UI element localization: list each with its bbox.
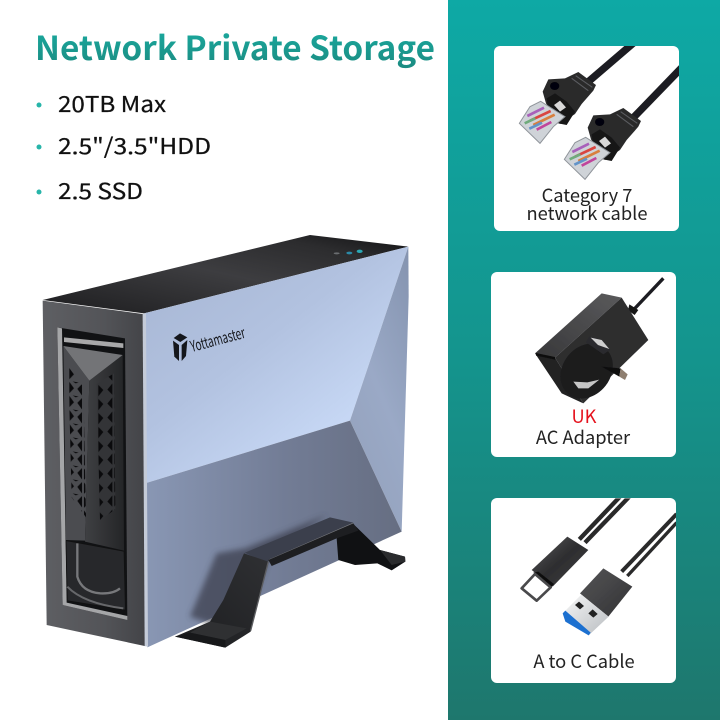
panel: AC adapter card bbox=[491, 272, 676, 457]
feature: 20TB Max: 20TB Max bbox=[58, 87, 166, 119]
enclosure front face bbox=[43, 301, 145, 646]
bay recess bbox=[57, 327, 127, 620]
right leg bbox=[337, 524, 405, 570]
icon: UK AC adapter bbox=[535, 278, 663, 409]
tray latch bbox=[66, 541, 125, 610]
panel: A to C cable card bbox=[491, 497, 677, 683]
panel: network cable card bbox=[494, 42, 683, 231]
enclosure top face bbox=[43, 235, 408, 313]
panel: teal accessories background bbox=[448, 0, 720, 720]
tray handle bar bbox=[64, 337, 123, 348]
upper band bbox=[245, 517, 353, 563]
caption: AC Adapter: AC Adapter bbox=[536, 424, 631, 450]
RJ45 connector upper bbox=[519, 42, 635, 143]
icon: two RJ45 network cables bbox=[519, 42, 683, 179]
folding stand bbox=[175, 515, 405, 648]
feature: HDD sizes: 2.5"/3.5"HDD bbox=[58, 129, 211, 161]
feature: SSD size: 2.5 SSD bbox=[58, 174, 143, 206]
front leg bbox=[175, 553, 268, 648]
panel: network cable card: network cable bbox=[527, 200, 647, 226]
metal edge highlight bbox=[143, 313, 148, 647]
enclosure side: lower facet bbox=[145, 421, 402, 647]
USB-C connector bbox=[522, 497, 629, 601]
brand logo bbox=[173, 321, 247, 361]
enclosure side: upper facet bbox=[144, 247, 408, 483]
caption: A to C Cable: A to C Cable bbox=[533, 648, 635, 674]
stand shadow bbox=[190, 515, 327, 623]
product: Yottamaster drive enclosure bbox=[43, 235, 409, 648]
tray body bbox=[63, 346, 89, 541]
logo wordmark: Yottamaster bbox=[187, 321, 247, 357]
icon: USB-A to USB-C cable bbox=[522, 497, 677, 635]
drive bay bbox=[57, 327, 127, 620]
RJ45 connector lower bbox=[564, 66, 683, 179]
ventilation holes bbox=[68, 367, 86, 517]
USB-A connector bbox=[563, 514, 677, 635]
caption: network cable: Category 7 bbox=[542, 182, 632, 208]
logo mark bbox=[173, 333, 187, 361]
feature list bbox=[36, 87, 211, 206]
title: Network Private Storage bbox=[35, 22, 435, 70]
enclosure side: right facet bbox=[350, 247, 409, 532]
caption: UK: UK bbox=[572, 403, 597, 429]
status LEDs bbox=[334, 250, 363, 254]
